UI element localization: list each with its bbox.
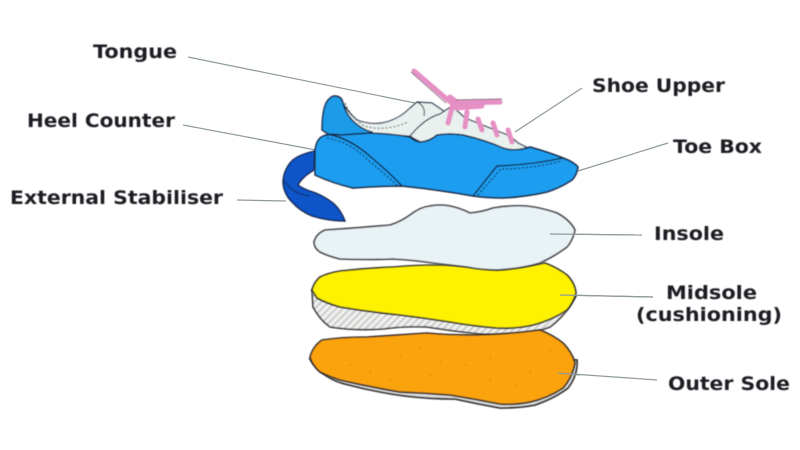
toe box stitching	[473, 158, 563, 196]
heel counter stitching	[327, 134, 402, 186]
white collar lining and tongue	[340, 97, 445, 137]
heel collar	[322, 96, 372, 141]
outer sole	[310, 330, 575, 404]
label: shoe upper: Shoe Upper	[592, 75, 726, 97]
outer sole under-rim	[310, 359, 577, 408]
insole	[314, 205, 575, 270]
midsole	[312, 263, 576, 328]
shoe	[315, 71, 578, 198]
eyestay	[410, 106, 528, 150]
label: tongue: Tongue	[93, 41, 177, 63]
leader lines	[183, 57, 668, 380]
label: midsole: Midsole	[666, 282, 757, 304]
label: toe box: Toe Box	[673, 136, 762, 158]
leader line ends on soles	[550, 234, 653, 375]
labels	[10, 41, 790, 395]
label: outer sole: Outer Sole	[668, 373, 790, 395]
laces	[414, 71, 512, 142]
external stabiliser	[283, 151, 345, 221]
label: external stabiliser: External Stabiliser	[10, 187, 224, 209]
body of shoe	[315, 133, 578, 198]
midsole hatch	[312, 290, 576, 335]
label: insole: Insole	[654, 223, 724, 245]
label: cushioning: (cushioning)	[636, 304, 782, 326]
label: heel counter: Heel Counter	[27, 110, 176, 132]
